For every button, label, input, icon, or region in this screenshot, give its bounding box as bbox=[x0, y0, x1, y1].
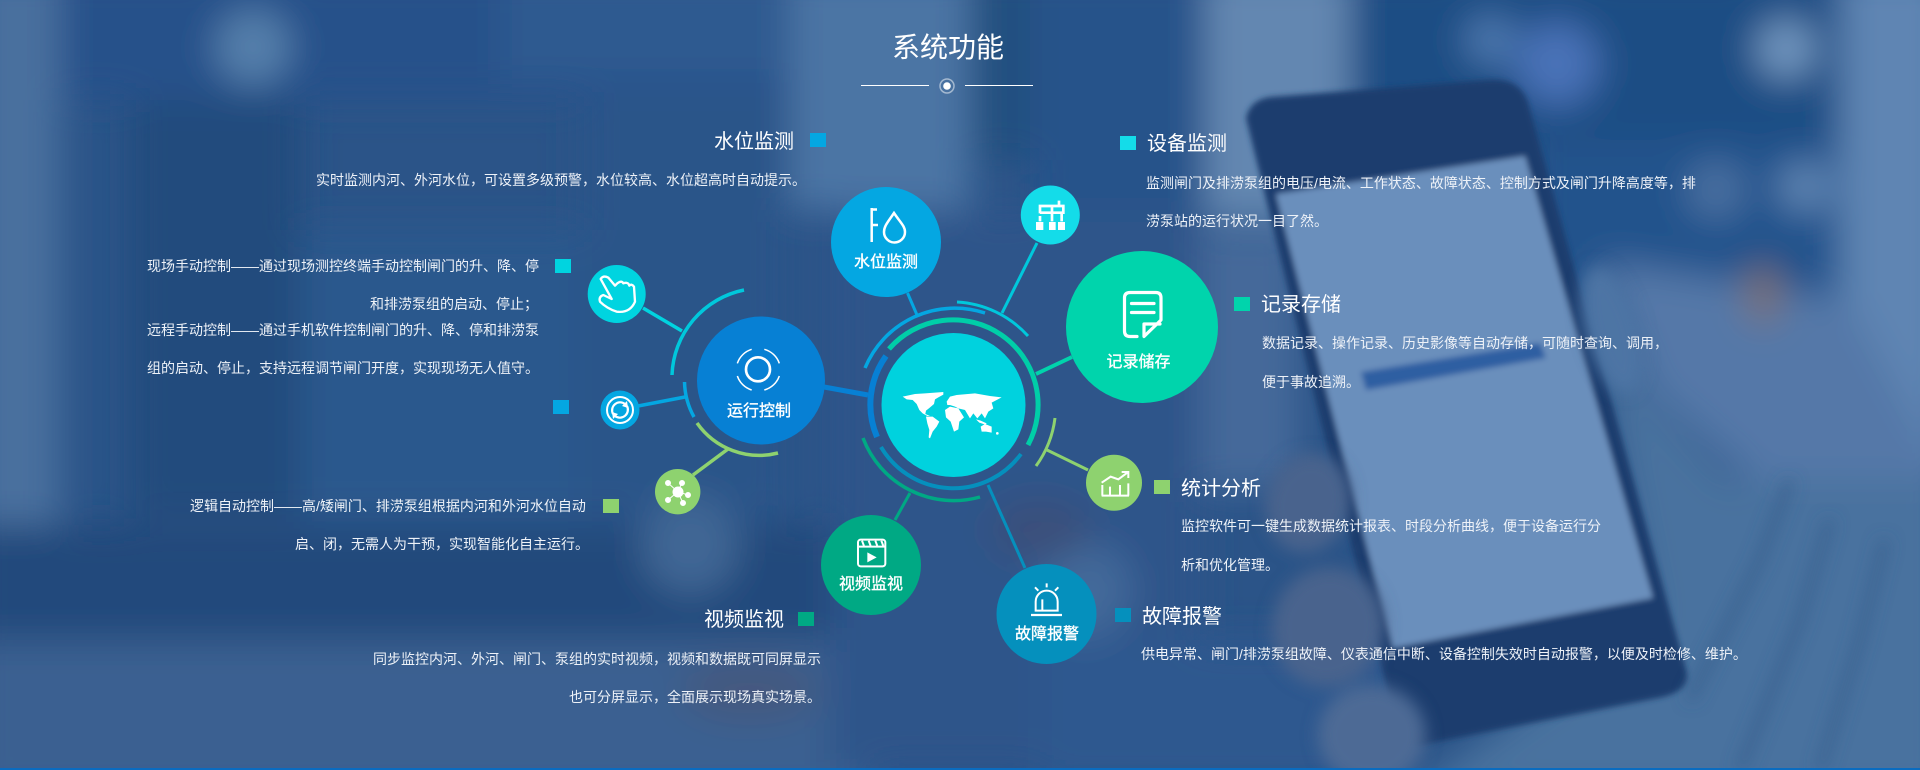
description continued: 启、闭，无需人为干预，实现智能化自主运行。 bbox=[295, 536, 589, 552]
description: 同步监控内河、外河、闸门、泵组的实时视频，视频和数据既可同屏显示 bbox=[373, 651, 821, 667]
heading: water level monitoring: 水位监测 bbox=[714, 131, 794, 153]
node: video monitoring: 视频监视 bbox=[839, 575, 903, 593]
description: remote manual control: 远程手动控制——通过手机软件控制闸门的升、降、停和排涝泵 bbox=[147, 322, 539, 338]
marker: remote control bbox=[553, 400, 569, 414]
description: on-site manual control continued: 和排涝泵组的启动、停止； bbox=[370, 296, 538, 312]
icon: water level gauge and drop bbox=[872, 208, 905, 242]
description continued: 便于事故追溯。 bbox=[1262, 374, 1360, 390]
icon: refresh bbox=[607, 397, 633, 423]
panel: manual and remote control bbox=[147, 258, 571, 376]
title: 系统功能 bbox=[892, 32, 1004, 63]
panel: logic automatic control bbox=[190, 498, 619, 552]
node: statistical analysis bbox=[1086, 455, 1142, 511]
node: manual control bbox=[588, 265, 646, 323]
node: water level monitoring: 水位监测 bbox=[854, 253, 918, 271]
description: 监控软件可一键生成数据统计报表、时段分析曲线，便于设备运行分 bbox=[1181, 518, 1601, 534]
heading: equipment monitoring: 设备监测 bbox=[1147, 133, 1227, 155]
node: water level monitoring bbox=[831, 187, 941, 297]
marker bbox=[1115, 608, 1131, 622]
node: fault alarm bbox=[996, 564, 1096, 664]
description: 供电异常、闸门/排涝泵组故障、仪表通信中断、设备控制失效时自动报警，以便及时检修、维护。 bbox=[1141, 646, 1747, 662]
marker bbox=[1154, 480, 1170, 494]
description: 监测闸门及排涝泵组的电压/电流、工作状态、故障状态、控制方式及闸门升降高度等，排 bbox=[1146, 175, 1696, 191]
icon: network tree bbox=[1036, 201, 1065, 230]
panel: video monitoring bbox=[373, 609, 821, 705]
title divider with centre dot bbox=[861, 78, 1033, 94]
heading: fault alarm: 故障报警 bbox=[1142, 606, 1222, 628]
connector lines bbox=[638, 243, 1088, 568]
marker bbox=[1234, 297, 1250, 311]
description: 逻辑自动控制——高/矮闸门、排涝泵组根据内河和外河水位自动 bbox=[190, 498, 586, 514]
description: 实时监测内河、外河水位，可设置多级预警，水位较高、水位超高时自动提示。 bbox=[316, 172, 806, 188]
description: remote manual control continued: 组的启动、停止，支持远程调节闸门开度，实现现场无人值守。 bbox=[147, 360, 539, 376]
icon: alarm beacon bbox=[1031, 583, 1062, 615]
node: record storage: 记录储存 bbox=[1106, 353, 1171, 371]
marker: manual bbox=[555, 259, 571, 273]
node: equipment monitoring bbox=[1021, 186, 1080, 244]
heading: statistical analysis: 统计分析 bbox=[1181, 478, 1261, 500]
node: logic automatic control bbox=[655, 469, 700, 514]
description: on-site manual control: 现场手动控制——通过现场测控终端手动控制闸门的升、降、停 bbox=[147, 258, 539, 274]
description: 数据记录、操作记录、历史影像等自动存储，可随时查询、调用， bbox=[1262, 335, 1668, 351]
panel: statistical analysis bbox=[1154, 478, 1601, 573]
heading: video monitoring: 视频监视 bbox=[704, 609, 784, 631]
icon: clapperboard bbox=[858, 540, 885, 566]
marker bbox=[810, 133, 826, 147]
marker bbox=[603, 499, 619, 513]
heading: record storage: 记录存储 bbox=[1261, 294, 1341, 316]
icon: hand pointer bbox=[600, 277, 635, 312]
icon: rising chart bbox=[1102, 472, 1129, 496]
marker bbox=[1120, 136, 1136, 150]
node: fault alarm: 故障报警 bbox=[1015, 625, 1079, 643]
icon: document bbox=[1124, 292, 1161, 336]
description continued: 也可分屏显示，全面展示现场真实场景。 bbox=[569, 689, 821, 705]
rings around the central hub bbox=[863, 302, 1055, 501]
rings around the operation control node bbox=[672, 290, 778, 455]
marker bbox=[798, 612, 814, 626]
node: record storage bbox=[1066, 251, 1218, 403]
panel: equipment monitoring bbox=[1120, 133, 1696, 229]
node: remote control bbox=[600, 390, 640, 430]
node: operation control bbox=[697, 316, 825, 444]
panel: record storage bbox=[1234, 294, 1668, 390]
panel: fault alarm bbox=[1115, 606, 1747, 662]
icon: ring with arcs bbox=[737, 349, 779, 390]
description continued: 析和优化管理。 bbox=[1181, 557, 1279, 573]
description continued: 涝泵站的运行状况一目了然。 bbox=[1146, 213, 1328, 229]
central node: world map bbox=[882, 333, 1026, 477]
node: operation control: 运行控制 bbox=[727, 402, 791, 420]
icon: network nodes bbox=[666, 480, 690, 506]
panel: water level monitoring bbox=[316, 131, 826, 188]
node: video monitoring bbox=[821, 515, 921, 615]
